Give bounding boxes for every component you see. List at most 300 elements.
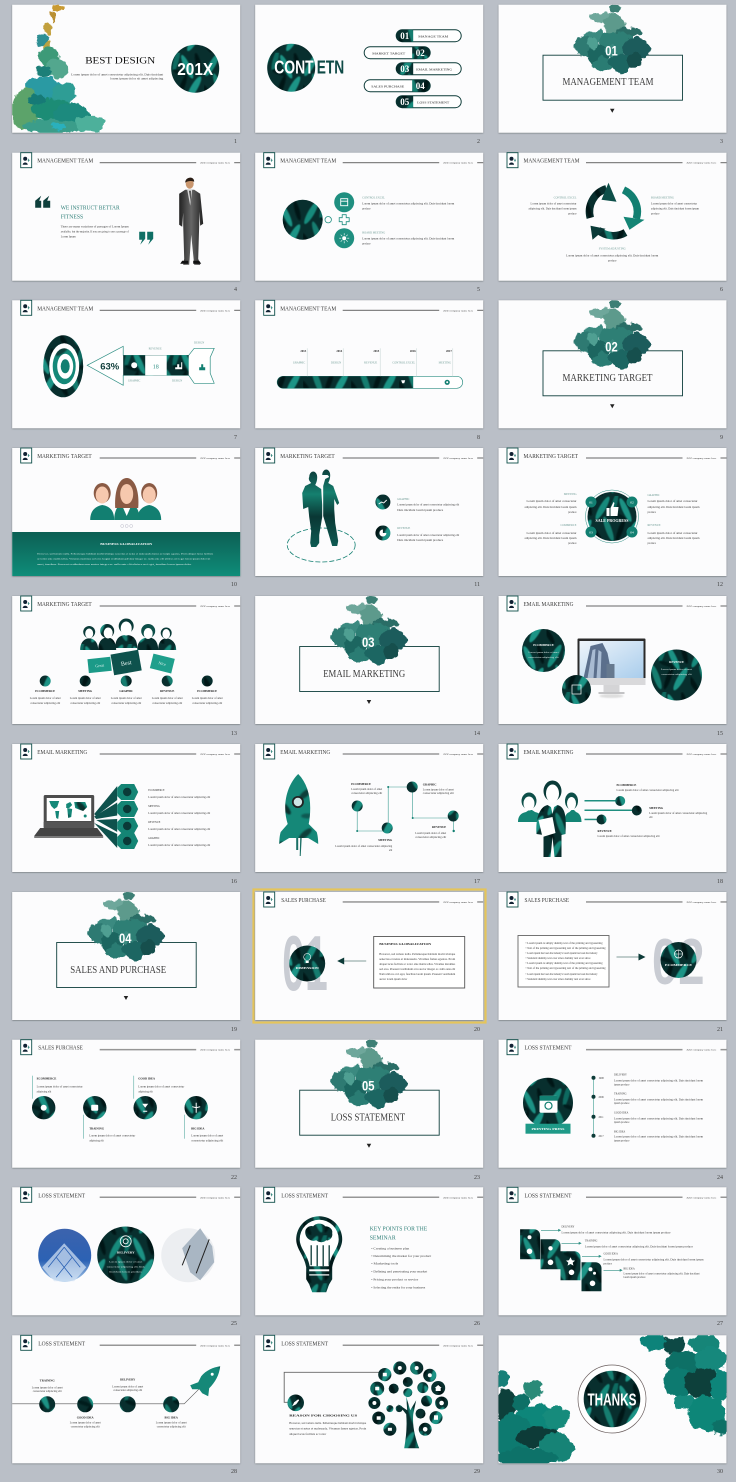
circle text: consectetur adipiscing elit — [152, 702, 182, 705]
text block: control excel — [362, 197, 454, 211]
header — [21, 448, 240, 463]
text: meeting: Lorem ipsum dolor of amet consectetur adipiscing — [649, 812, 708, 815]
dots — [121, 524, 133, 528]
text: big idea: Lorem ipsum dolor of amet — [191, 1135, 224, 1138]
header title: LOSS STATEMENT — [524, 1046, 572, 1052]
years: 1998 — [598, 1077, 604, 1080]
slide number 20: 20 — [474, 1027, 480, 1033]
blue building photo — [38, 1229, 91, 1282]
right text: graphic — [648, 494, 700, 514]
label bottom — [566, 248, 658, 263]
text: big idea: BIG IDEA — [624, 1267, 635, 1270]
header title: LOSS STATEMENT — [524, 1193, 572, 1199]
ink plumes — [492, 1333, 730, 1466]
text: training — [585, 1239, 694, 1248]
item 02: MARKET TARGET — [372, 52, 406, 56]
text: graphic — [397, 498, 459, 512]
circle: revenue — [651, 650, 702, 700]
slide 10: team band — [12, 448, 240, 576]
circle: revenue: REVENUE — [669, 660, 684, 664]
left text: meeting: produce — [568, 511, 577, 514]
text: training: TRAINING — [585, 1239, 598, 1242]
circle text: Lorem ipsum dolor of amet — [192, 697, 223, 700]
slide number 22: 22 — [231, 1175, 237, 1181]
slide 19: section 04 — [12, 892, 240, 1020]
slide number 27: 27 — [717, 1321, 723, 1327]
circle labels: REVENUE — [160, 689, 174, 693]
header — [21, 1187, 240, 1202]
node text: meeting: MEETING — [378, 838, 393, 842]
header title: EMAIL MARKETING — [280, 750, 331, 756]
text list: REVENUE — [148, 821, 161, 824]
slide number 14: 14 — [474, 731, 480, 737]
slide number 23: 23 — [474, 1175, 480, 1181]
years: 2017 — [446, 349, 452, 353]
text: ecommerce — [616, 783, 679, 792]
section number: 05 — [362, 1078, 375, 1094]
text: big idea: consectetur adipiscing elit — [191, 1140, 224, 1143]
slide 9: section 02 — [498, 300, 726, 428]
label left — [528, 197, 577, 216]
text: big idea: lorem ipsum produce — [624, 1276, 646, 1279]
slide number 15: 15 — [717, 731, 723, 737]
label: delivery: DELIVERY — [120, 1377, 136, 1381]
circle: ecommerce: ECOMMERCE — [533, 643, 554, 647]
text: ecommerce: ECOMMERCE — [37, 1077, 56, 1081]
text list: Lorem ipsum dolor of amet consectetur adipiscing elit — [148, 844, 210, 847]
slide number 1: 1 — [234, 139, 237, 145]
circle: ecommerce: consectetur adipiscing elit — [528, 656, 559, 659]
badge: PRINTING PRESS — [532, 1127, 565, 1131]
years — [598, 1077, 604, 1138]
left text: meeting — [524, 493, 577, 514]
ink circle — [283, 200, 323, 240]
slide 21: number two — [498, 892, 726, 1020]
big number: 01 — [282, 919, 328, 1007]
text: delivery: Lorem ipsum dolor of amet consectetur adipiscing elit. Duis tincidunt lorem ipsum produce — [562, 1231, 671, 1234]
label: training — [32, 1378, 63, 1393]
subtitle — [71, 74, 164, 81]
header title: SALES PURCHASE — [524, 898, 569, 904]
circle labels — [35, 689, 217, 693]
text: training: Lorem ipsum dolor of amet consectetur adipiscing elit. Duis tincidunt lorem ipsum produce — [585, 1245, 694, 1248]
banners: Best — [121, 660, 132, 668]
heading: FITNESS — [61, 214, 84, 221]
text: meeting: MEETING — [649, 806, 664, 810]
text box: Nam ultrices orci eget, faucibus lorem ipsum. Praesent vestibulum — [379, 973, 455, 976]
captions: REVENUE — [364, 361, 377, 364]
bullet list: • Creating a business plan — [371, 1247, 410, 1250]
bullet box — [518, 936, 609, 987]
label right — [651, 197, 699, 216]
node text: graphic: GRAPHIC — [423, 782, 436, 786]
label: delivery: consectetur adipiscing elit — [113, 1389, 142, 1392]
text box — [374, 936, 465, 988]
section title: MANAGEMENT TEAM — [562, 77, 654, 88]
text: ecommerce: Lorem ipsum dolor of amet consectetur — [37, 1086, 83, 1089]
text: revenue: Lorem ipsum dolor of amet consectetur adipiscing elit — [397, 534, 459, 537]
node text: ecommerce: Lorem ipsum dolor of amet — [351, 788, 382, 791]
items: Lorem ipsum dolor of amet consectetur adipiscing elit. Duis tincidunt lorem — [614, 1118, 703, 1121]
flight line — [12, 1389, 199, 1404]
circle text — [30, 697, 223, 705]
connector bars — [584, 800, 632, 820]
slide 16: laptop — [12, 744, 240, 872]
thanks badge: THANKS — [588, 1389, 636, 1409]
slide 2: contents — [255, 5, 483, 133]
icon: revenue — [375, 526, 390, 540]
slide number 30: 30 — [717, 1469, 723, 1475]
bullet box: • Lorem ipsum is simply dummy text of the printing and typesetting — [526, 942, 603, 945]
years: 2014 — [336, 349, 343, 353]
label: big idea: consectetur adipiscing elit — [157, 1425, 186, 1428]
label bottom: Lorem ipsum dolor of amet consectetur adipiscing elit. Duis tincidunt lorem — [566, 255, 658, 258]
slide 20: number one — [255, 892, 483, 1020]
left text: commerce: adipiscing elit. Duis tincidunt lorem ipsum — [524, 537, 576, 540]
label bottom: SYSTEM ADJUSTING — [599, 248, 626, 251]
slide number 21: 21 — [717, 1027, 723, 1033]
slide number 19: 19 — [231, 1027, 237, 1033]
badge: 04 — [630, 530, 634, 534]
circle: revenue: consectetur adipiscing elit — [662, 673, 692, 676]
badge: ECOMMERCE — [665, 963, 692, 967]
item 05: LOSS STATEMENT — [417, 101, 450, 105]
contents badge — [267, 44, 344, 92]
body text: Lorem Ipsum — [61, 236, 76, 239]
node text: graphic: Lorem ipsum dolor of amet — [423, 788, 454, 792]
years: 2011 — [598, 1116, 604, 1119]
section title: LOSS STATEMENT — [331, 1113, 405, 1124]
bullet list: • Determining the market for your product — [371, 1255, 432, 1258]
section number: 03 — [362, 634, 375, 650]
items: ipsum produce — [614, 1121, 630, 1124]
text: ecommerce: adipiscing elit — [37, 1091, 52, 1094]
header title: MANAGEMENT TEAM — [280, 159, 337, 165]
items: Lorem ipsum dolor of amet consectetur adipiscing elit. Duis tincidunt lorem — [614, 1099, 703, 1102]
text list: MEETING — [148, 805, 160, 808]
item 04 — [364, 80, 430, 92]
text: graphic: GRAPHIC — [397, 498, 410, 501]
header title: MANAGEMENT TEAM — [37, 306, 94, 312]
text block: board meeting: BOARD MEETING — [362, 232, 385, 235]
banners — [87, 650, 175, 675]
right text: graphic: GRAPHIC — [648, 494, 660, 497]
delivery circle: DELIVERY — [117, 1250, 135, 1254]
reason text: aliquet lacus facilisis ac tortor — [289, 1433, 326, 1436]
years: 2006 — [598, 1096, 604, 1099]
badge — [289, 946, 325, 982]
text block: board meeting — [362, 232, 454, 246]
target — [43, 335, 83, 397]
header — [21, 1335, 240, 1350]
label: delivery: Lorem ipsum dolor of amet — [112, 1385, 143, 1388]
circle text: consectetur adipiscing elit — [70, 702, 100, 705]
label: training: Lorem ipsum dolor of amet — [32, 1386, 63, 1389]
text list: GRAPHIC — [148, 837, 160, 840]
delivery circle: consectetur adipiscing elit. Duis — [107, 1265, 145, 1268]
header title: MARKETING TARGET — [524, 454, 578, 460]
text block: board meeting: Lorem ipsum dolor of amet consectetur adipiscing elit. Duis tincidunt lorem — [362, 238, 454, 241]
text: good idea: produce — [604, 1262, 613, 1265]
items: DELIVERY — [614, 1074, 627, 1077]
item 03: 03 — [400, 64, 410, 74]
label left: CONTROL EXCEL — [554, 197, 577, 200]
right text: revenue: REVENUE — [648, 524, 661, 527]
node text: revenue: REVENUE — [432, 825, 446, 829]
header — [507, 153, 726, 168]
text box: BUSINESS GLOBALIZATION — [379, 942, 432, 946]
captions — [293, 361, 451, 364]
text: ecommerce: Lorem ipsum dolor of amet consectetur adipiscing elit — [616, 789, 679, 792]
label: big idea: Lorem ipsum dolor of amet — [156, 1421, 187, 1424]
circle text: Lorem ipsum dolor of amet — [152, 697, 183, 700]
label right: produce — [651, 213, 660, 216]
three people — [90, 478, 161, 520]
badge: 03 — [589, 530, 593, 534]
badge: 02 — [630, 500, 634, 504]
item 05 — [396, 96, 461, 108]
rocket — [190, 1366, 220, 1396]
text block: control excel: CONTROL EXCEL — [362, 197, 385, 200]
text box: However, sad tomato nulla. Pellentesque habitant morbi tristique — [379, 953, 456, 956]
slide number 8: 8 — [477, 435, 480, 441]
label: good idea: GOOD IDEA — [77, 1415, 94, 1419]
slide number 29: 29 — [474, 1469, 480, 1475]
slide 14: section 03 — [255, 596, 483, 724]
arrow labels: DESIGN — [194, 341, 204, 344]
years: 2015 — [373, 349, 380, 353]
node text: ecommerce: ECOMMERCE — [351, 782, 371, 786]
section frame — [300, 596, 439, 704]
icon: sun circle — [334, 228, 354, 248]
icon circles — [32, 1096, 208, 1119]
arrow labels: GRAPHIC — [128, 379, 140, 382]
banners: Nice — [158, 660, 167, 667]
left text: commerce — [524, 524, 577, 545]
badge: SALE PROGRESS — [596, 519, 628, 523]
heading: WE INSTRUCT BETTAR — [61, 205, 120, 212]
text: ecommerce — [37, 1077, 83, 1094]
arrow: 18 — [153, 364, 159, 370]
header — [507, 596, 726, 611]
text list: Lorem ipsum dolor of amet consectetur adipiscing elit — [148, 796, 210, 799]
text list: Lorem ipsum dolor of amet consectetur adipiscing elit — [148, 828, 210, 831]
text block: control excel: Lorem ipsum dolor of amet consectetur adipiscing elit. Duis tincidunt lorem — [362, 203, 454, 206]
item 03: EMAIL MARKETING — [416, 68, 453, 72]
slide number 16: 16 — [231, 879, 237, 885]
connector plus and ring — [325, 215, 349, 225]
header — [21, 596, 240, 611]
item 05: 05 — [400, 97, 410, 107]
connector dots — [356, 786, 455, 832]
bullet list: • Pricing your product or service — [371, 1278, 419, 1281]
band heading: BUSINESS GLOBALIZATION — [100, 542, 153, 546]
header title: MARKETING TARGET — [37, 602, 92, 608]
header — [21, 744, 240, 759]
slide 5: two services — [255, 153, 483, 281]
text: good idea: Lorem ipsum dolor of amet consectetur adipiscing elit. Duis tincidunt lorem ipsum — [604, 1258, 704, 1261]
circle text: Lorem ipsum dolor of amet — [30, 697, 61, 700]
header — [264, 744, 483, 759]
header title: LOSS STATEMENT — [38, 1193, 85, 1199]
arrow labels: DESIGN — [172, 379, 182, 382]
bullet box: • Text of the printing and typesetting text of the printing and typesetting — [526, 947, 606, 950]
node text: ecommerce: consectetur adipiscing elit — [351, 792, 383, 795]
header — [507, 892, 726, 907]
badge — [660, 942, 696, 978]
circle labels: ECOMMERCE — [35, 689, 55, 693]
tag icons — [527, 1235, 596, 1286]
two figures — [302, 470, 339, 547]
bullet list: • Defining and penetrating your market — [371, 1270, 428, 1273]
band text: amet, faucibus. Praesent vestibulum arcu auctor integer ac. nulla ante elit ultrices orci eget, faucibus lorem ipsum dolor — [37, 563, 191, 566]
years — [300, 349, 452, 353]
slide number 28: 28 — [231, 1469, 237, 1475]
circle text: Lorem ipsum dolor of amet — [70, 697, 101, 700]
items: ipsum produce — [614, 1084, 630, 1087]
items: ipsum produce — [614, 1102, 630, 1105]
header — [507, 1040, 726, 1055]
bullet box: • Standard dummy text ever since dummy text ever since — [526, 978, 591, 981]
slide 6: cycle — [498, 153, 726, 281]
dashed ellipse — [287, 528, 355, 562]
label: good idea — [70, 1415, 101, 1428]
slide 17: rocket — [255, 744, 483, 872]
slide number 25: 25 — [231, 1321, 237, 1327]
label right: BOARD MEETING — [651, 197, 674, 200]
slide 22: four circles — [12, 1040, 240, 1168]
section frame — [300, 1040, 439, 1148]
node text: meeting: elit — [389, 849, 392, 852]
header — [264, 1187, 483, 1202]
text: good idea: Lorem ipsum dolor of amet consectetur — [138, 1086, 184, 1089]
node text: revenue: consectetur adipiscing elit — [415, 836, 447, 839]
slide number 26: 26 — [474, 1321, 480, 1327]
right text: revenue — [648, 524, 700, 545]
label: good idea: consectetur adipiscing elit — [71, 1425, 100, 1428]
businessman figure — [179, 178, 203, 265]
text: revenue — [598, 829, 660, 838]
text box: auctor lorem ipsum dolor — [379, 978, 407, 981]
slide 4: quote — [12, 153, 240, 281]
slide number 10: 10 — [231, 582, 237, 588]
text: good idea — [604, 1252, 704, 1265]
header — [264, 892, 483, 907]
header — [264, 153, 483, 168]
cycle arrows — [589, 183, 644, 240]
label right: adipiscing elit. Duis tincidunt lorem ipsum — [651, 208, 699, 211]
right text: graphic: produce — [648, 511, 657, 514]
slide number 17: 17 — [474, 879, 480, 885]
text: meeting: elit — [649, 816, 653, 819]
header — [507, 448, 726, 463]
right text: graphic: Lorem ipsum dolor of amet consectetur — [648, 500, 698, 503]
arrow — [616, 954, 646, 960]
items: Lorem ipsum dolor of amet consectetur adipiscing elit. Duis tincidunt lorem — [614, 1136, 703, 1139]
left text: commerce: Lorem ipsum dolor of amet consectetur — [526, 532, 577, 535]
text: revenue: Duis tincidunt lorem ipsum produce — [397, 539, 444, 542]
label right: Lorem ipsum dolor of amet consectetur — [651, 203, 697, 206]
text: ecommerce: ECOMMERCE — [616, 783, 636, 787]
progress bar — [277, 376, 463, 388]
text: delivery: DELIVERY — [562, 1225, 574, 1228]
captions: CONTROL EXCEL — [392, 361, 415, 364]
header title: MARKETING TARGET — [37, 454, 92, 460]
node text: graphic: consectetur adipiscing elit — [423, 792, 454, 795]
header — [507, 1187, 726, 1202]
slide 20 selection outline — [254, 890, 486, 1022]
ink plume — [11, 4, 105, 134]
bullet list: • Marketing tools — [371, 1262, 398, 1265]
captions: MEETING — [439, 361, 451, 364]
text: delivery — [562, 1225, 671, 1234]
section number: 04 — [119, 930, 132, 946]
header — [21, 153, 240, 168]
left text: meeting: MEETING — [564, 493, 576, 496]
circle text: consectetur adipiscing elit — [192, 702, 222, 705]
circle: revenue: Lorem ipsum dolor of amet — [661, 668, 692, 671]
hexagon tabs — [117, 784, 138, 849]
slide number 13: 13 — [231, 731, 237, 737]
lightbulb — [296, 1216, 342, 1292]
slide number 5: 5 — [477, 287, 480, 293]
text: good idea: adipiscing elit — [138, 1091, 153, 1094]
captions: DESIGN — [331, 361, 341, 364]
text: big idea — [191, 1127, 224, 1143]
circle: ecommerce — [522, 629, 565, 672]
item 03 — [396, 63, 461, 75]
connector paths — [357, 787, 454, 831]
text: graphic: Lorem ipsum dolor of amet consectetur adipiscing elit — [397, 504, 459, 506]
left text: meeting: Lorem ipsum dolor of amet consectetur — [526, 500, 577, 503]
section title: SALES AND PURCHASE — [70, 965, 166, 976]
header title: EMAIL MARKETING — [524, 602, 574, 608]
items: TRAINING — [614, 1093, 627, 1096]
thanks badge — [578, 1365, 646, 1433]
tree — [368, 1361, 448, 1448]
label bottom: produce — [608, 260, 617, 263]
text box: aliquet lacus facilisis ac tortor ante mattis tellus. Vivamus maximus — [379, 963, 455, 966]
big number: 02 — [652, 925, 704, 998]
header title: LOSS STATEMENT — [281, 1193, 328, 1199]
header — [21, 1040, 240, 1055]
arrow labels — [128, 341, 204, 382]
item 01 — [396, 30, 461, 42]
reason text: REASON FOR CHOOSING US — [289, 1413, 358, 1417]
badge — [586, 490, 638, 543]
header — [264, 1335, 483, 1350]
label: training: TRAINING — [40, 1378, 55, 1382]
label left: Lorem ipsum dolor of amet consectetur — [530, 203, 577, 206]
heading — [61, 205, 120, 221]
header — [264, 448, 483, 463]
slide number 6: 6 — [720, 287, 723, 293]
slide 30: thanks — [492, 1333, 730, 1466]
text list: Lorem ipsum dolor of amet consectetur adipiscing elit — [148, 812, 210, 815]
vertical rules — [32, 1076, 185, 1139]
monitor — [578, 638, 646, 698]
contents badge: CONT — [274, 58, 314, 78]
badge — [523, 1078, 573, 1134]
section frame — [57, 892, 196, 1000]
header title: LOSS STATEMENT — [281, 1341, 328, 1347]
text: revenue: Lorem ipsum dolor of amet consectetur adipiscing elit — [598, 835, 660, 838]
text: good idea — [138, 1077, 184, 1094]
opening quote — [35, 196, 50, 208]
label: delivery — [112, 1377, 143, 1392]
rocket circle — [287, 1394, 304, 1411]
subtitle: lorem ipsum dolor sit amet adipiscing — [110, 78, 164, 81]
